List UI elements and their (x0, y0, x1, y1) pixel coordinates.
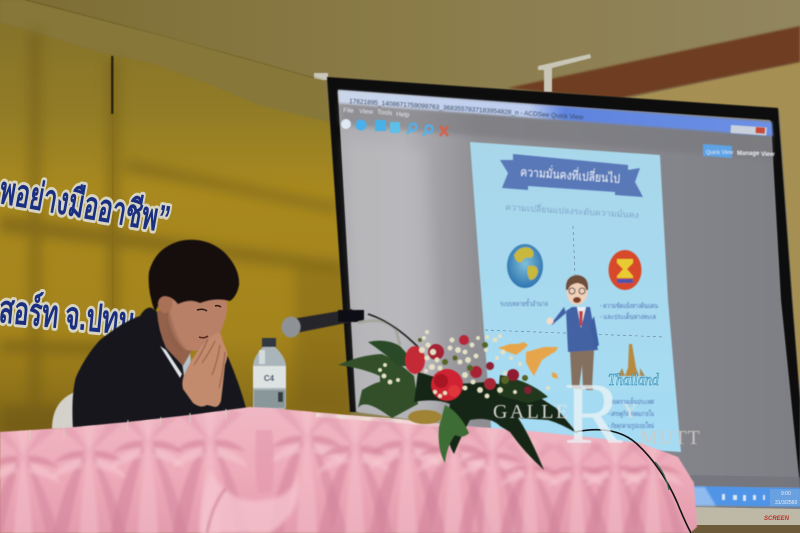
face (168, 293, 227, 351)
watermark: gallery by mutt (493, 366, 701, 463)
banner text line 2: สอร์ท จ.ปทุม (0, 288, 137, 346)
watermark: gallery by mutt: GALLE (493, 401, 571, 423)
slide world map (498, 342, 558, 379)
slide ribbon title (500, 154, 643, 197)
neck (157, 300, 192, 366)
black cable (575, 430, 691, 533)
slide temple icon (618, 344, 645, 376)
slide figure: man in suit (546, 275, 599, 390)
slide subtitle: ความเปลี่ยนแปลงระดับความมั่นคง (505, 200, 639, 220)
panel: pink table skirt (0, 402, 697, 533)
projector bracket (314, 54, 591, 92)
screen surface (338, 90, 800, 512)
praying hands (182, 333, 227, 407)
lower dim band (690, 475, 800, 487)
shirt collar (160, 346, 182, 378)
taskbar: 31/3/2560 (775, 500, 797, 506)
banner text line 1: พอย่างมืออาชีพ” (0, 170, 173, 241)
panel: gold curtain with banner text (0, 0, 352, 440)
window title bar: 17621895_1408671759099763_3683557837183954828_n - ACDSee Quick View (349, 98, 584, 121)
icon: ASEAN emblem (608, 250, 642, 290)
menu bar: View (359, 108, 374, 116)
window control buttons (730, 125, 767, 135)
slide ribbon title: ความมั่นคงที่เปลี่ยนไป (520, 163, 621, 186)
curtain shadows (0, 30, 351, 435)
curtain slit (111, 56, 114, 114)
slide label left: ระบบหลายขั้วอำนาจ (500, 297, 548, 308)
face shadow (166, 300, 186, 350)
foliage (338, 341, 578, 470)
watermark: gallery by mutt: R (564, 366, 623, 463)
taskbar (688, 486, 800, 507)
toolbar dark band (339, 103, 772, 160)
swags (0, 402, 685, 533)
blossoms (378, 330, 550, 401)
curtain valance (0, 0, 330, 122)
wooden beam (508, 26, 800, 98)
quick view tabs: Manage (737, 151, 760, 157)
menu bar (343, 107, 410, 119)
white table edge (316, 413, 450, 428)
menu bar: File (343, 107, 354, 115)
panel: projection screen (327, 77, 800, 533)
water bottle: C4 (264, 374, 275, 383)
light wash (345, 140, 440, 415)
screen bottom frame (690, 507, 800, 527)
flower arrangement (338, 330, 578, 470)
slide bullet list: - เศรษฐกิจ สังคมภายใน (608, 409, 654, 418)
quick view tabs (703, 144, 775, 158)
vase (408, 410, 442, 424)
quick view tabs: View (761, 152, 775, 158)
dark jacket (72, 308, 247, 430)
quick view tabs: Quick View (706, 150, 733, 156)
slide labels right: - ความขัดแย้งทางดินแดน (600, 302, 658, 310)
taskbar: 9:00 (781, 491, 791, 497)
central drape swag (200, 470, 299, 533)
water bottle (253, 338, 286, 410)
slide labels right (600, 302, 658, 321)
menu bar: Tools (377, 109, 393, 117)
slide bullet list: - ภัยคุกคามรูปแบบใหม่ (608, 421, 654, 430)
pin marks along top edge (30, 409, 226, 440)
person: seated speaker with hands in wai (72, 240, 247, 430)
ear (158, 293, 172, 313)
slide labels right: - และประเด็นทางทะเล (600, 312, 656, 321)
watermark: gallery by mutt: Y (623, 400, 637, 422)
menu bar: Help (396, 111, 410, 119)
window title bar (338, 90, 773, 136)
hair (149, 240, 239, 312)
slide bullet list: - สงครามเย็นประเทศ (608, 397, 654, 406)
icon: globe (507, 244, 543, 288)
screen frame (327, 77, 800, 500)
watermark: gallery by mutt: MUTT (640, 427, 701, 449)
chair back (52, 392, 77, 429)
slide Thailand lettering: Thailand (608, 370, 659, 389)
microphone on stand (282, 309, 418, 347)
panel: projected slide (470, 142, 681, 452)
eyes and mouth (197, 306, 221, 338)
slide bullet list (608, 397, 654, 430)
ceiling seam (25, 0, 320, 80)
dashed axis lines (485, 226, 665, 337)
panel: projection screen: SCREEN (764, 516, 790, 522)
toolbar icons (341, 119, 448, 136)
